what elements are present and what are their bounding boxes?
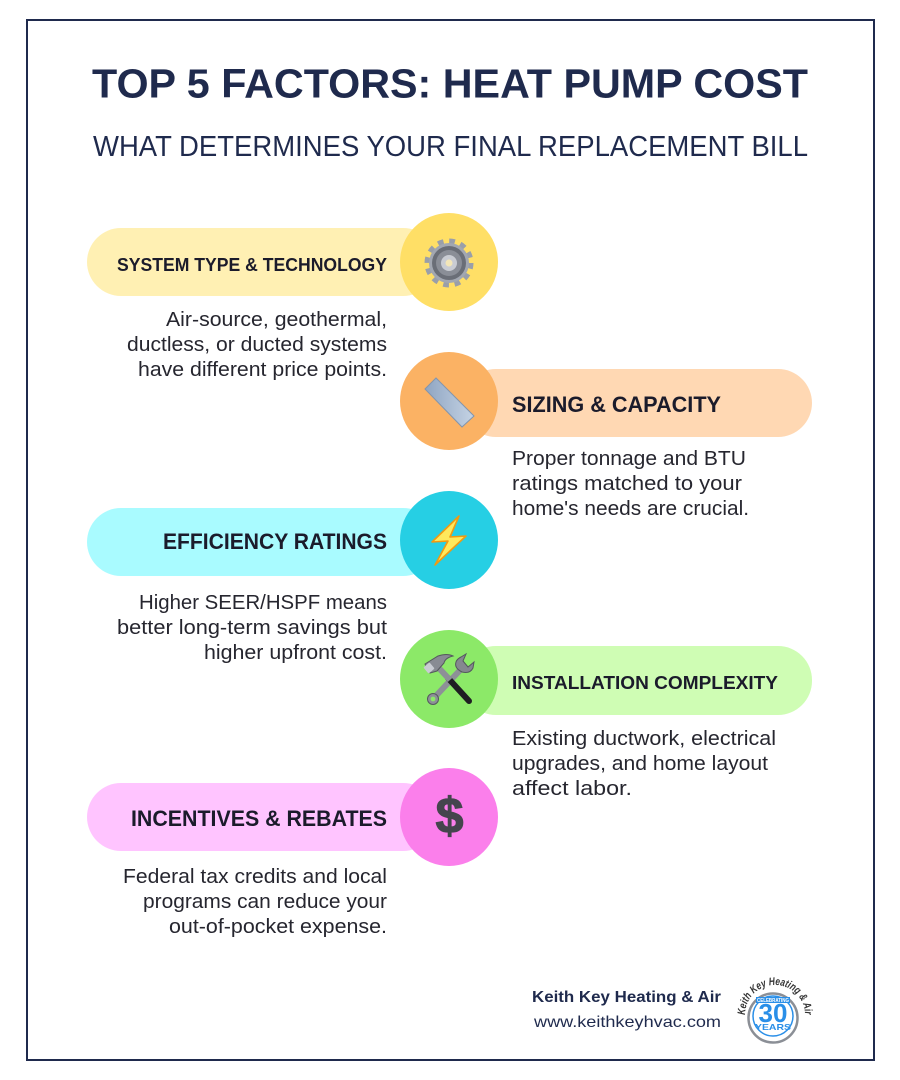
- body text: [512, 728, 776, 800]
- body text: ductless, or ducted systems: [127, 334, 387, 356]
- logo: 30 years badge: [738, 977, 813, 1044]
- body text: [127, 309, 387, 381]
- title: TOP 5 FACTORS: HEAT PUMP COST: [92, 60, 808, 106]
- icon: dollar sign: [400, 768, 498, 866]
- heading: INSTALLATION COMPLEXITY: [512, 672, 779, 693]
- body text: [123, 866, 387, 938]
- icon: gear: [400, 213, 498, 311]
- logo: 30 years badge: Keith Key Heating & Air: [738, 977, 813, 1015]
- body text: Higher SEER/HSPF means: [139, 592, 387, 614]
- heading: SYSTEM TYPE & TECHNOLOGY: [117, 255, 387, 275]
- logo: 30 years badge: 30: [759, 998, 787, 1028]
- body text: [117, 592, 387, 664]
- subtitle: WHAT DETERMINES YOUR FINAL REPLACEMENT BILL: [93, 131, 808, 163]
- body text: Existing ductwork, electrical: [512, 728, 776, 750]
- footer website: www.keithkeyhvac.com: [533, 1014, 721, 1031]
- panel: incentives and rebates: [87, 768, 498, 938]
- logo: 30 years badge: CELEBRATING: [757, 998, 789, 1004]
- body text: Air-source, geothermal,: [166, 309, 387, 331]
- heading pill: [462, 369, 812, 437]
- body text: have different price points.: [138, 359, 387, 381]
- footer company name: Keith Key Heating & Air: [532, 989, 721, 1006]
- body text: better long-term savings but: [117, 617, 387, 639]
- icon: dollar sign: $: [436, 788, 464, 844]
- body text: ratings matched to your: [512, 473, 742, 495]
- heading pill: [87, 783, 437, 851]
- body text: Federal tax credits and local: [123, 866, 387, 888]
- body text: Proper tonnage and BTU: [512, 448, 746, 470]
- icon: hammer and wrench: [400, 630, 498, 728]
- body text: home's needs are crucial.: [512, 498, 749, 520]
- panel: sizing and capacity: [400, 352, 812, 520]
- panel: efficiency ratings: [87, 491, 498, 664]
- icon: lightning bolt: [400, 491, 498, 589]
- heading pill: [87, 508, 437, 576]
- icon: ruler: [400, 352, 498, 450]
- heading pill: [462, 646, 812, 715]
- heading: SIZING & CAPACITY: [512, 392, 721, 417]
- logo: 30 years badge: YEARS: [755, 1022, 791, 1032]
- body text: affect labor.: [512, 778, 632, 800]
- body text: higher upfront cost.: [204, 642, 387, 664]
- body text: programs can reduce your: [143, 891, 387, 913]
- body text: [512, 448, 749, 520]
- panel: installation complexity: [400, 630, 812, 800]
- heading pill: [87, 228, 437, 296]
- heading: EFFICIENCY RATINGS: [163, 529, 387, 554]
- body text: out-of-pocket expense.: [169, 916, 387, 938]
- heading: INCENTIVES & REBATES: [131, 806, 387, 831]
- body text: upgrades, and home layout: [512, 753, 768, 775]
- panel: system type and technology: [87, 213, 498, 381]
